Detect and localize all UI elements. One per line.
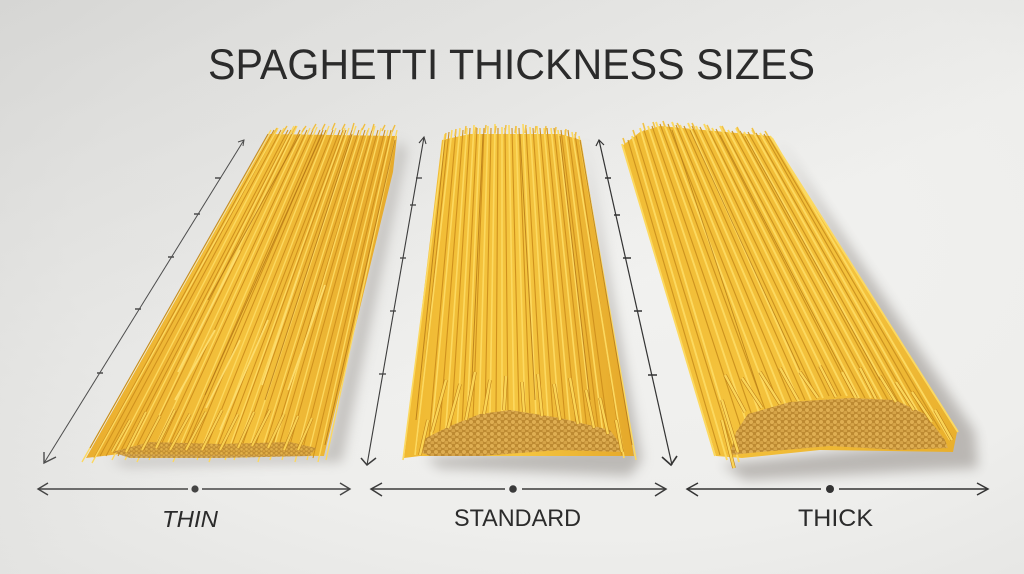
arrow: standard length [361,137,426,465]
bundle body: standard [404,134,634,458]
label: thin: THIN [162,506,218,532]
light strands: thick [622,122,958,462]
light strands: standard [403,124,636,460]
strand tips: thick [623,121,768,144]
cast shadow: thin [110,140,406,466]
strand tips: thin [272,123,395,136]
strand tips: standard [445,125,576,140]
arrow: thin length [44,140,244,463]
light strands: thin [82,126,397,463]
deep shadow lines: standard [416,134,632,445]
cut ends: standard [420,410,622,456]
dark strand gaps: standard [416,128,622,455]
dark strand gaps: thick [628,124,940,455]
deep shadow lines: thick [672,130,880,395]
cut ends: thin [112,442,316,458]
deep shadow lines: thin [90,134,395,448]
width arrow: standard [371,483,666,496]
cut ends: thick [730,398,948,455]
yellow tips over cut ends: thick [722,366,952,468]
title: SPAGHETTI THICKNESS SIZES [208,41,815,89]
panel: thin spaghetti [82,123,406,466]
dark strand gaps: thin [94,130,391,458]
panel: thick spaghetti [622,121,978,480]
yellow tips over cut ends: thin [112,410,312,452]
panel: standard spaghetti [403,124,642,476]
bundle body: thick [622,126,957,458]
arrow: thick length [596,140,677,465]
label: standard: STANDARD [454,505,581,532]
width arrow: thin [38,483,350,495]
cast shadow: standard [425,140,642,476]
cast shadow: thick [722,140,978,480]
short strand ends: thin [175,250,325,430]
yellow tips over cut ends: standard [420,372,622,455]
bundle body: thin [86,134,397,458]
label: thick: THICK [798,505,873,532]
width arrow: thick [687,483,988,496]
